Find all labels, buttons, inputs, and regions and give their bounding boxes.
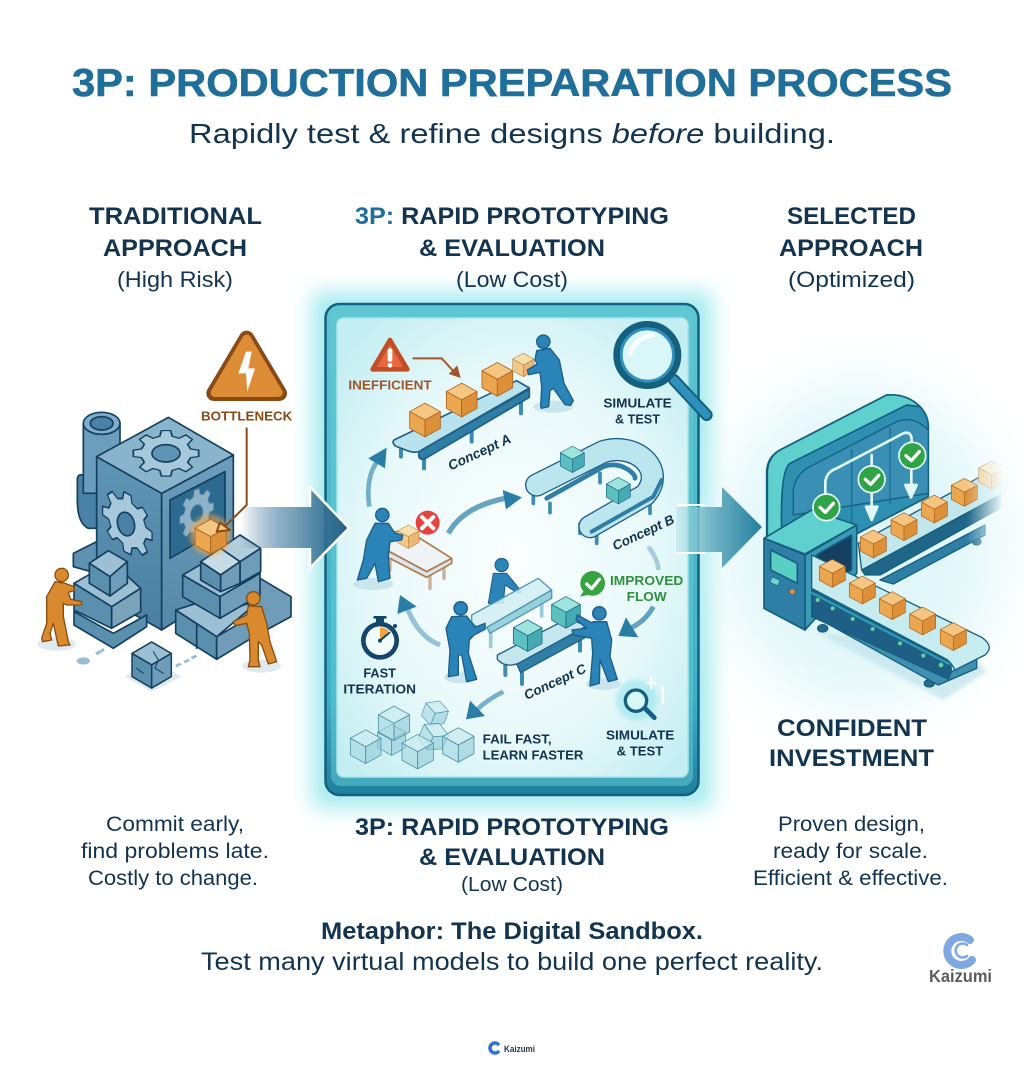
- heading: 3P rapid prototyping: (Low Cost): [456, 267, 568, 292]
- improved flow badge: [580, 571, 605, 597]
- small magnifier icon: [616, 678, 663, 721]
- label: improved flow: IMPROVED: [610, 574, 683, 588]
- worker at rejected table: [353, 508, 403, 590]
- heading: 3P repeated: (Low Cost): [461, 874, 563, 896]
- line shadow: [813, 630, 987, 700]
- text: traditional summary: Costly to change.: [88, 867, 258, 890]
- label: fail fast: LEARN FASTER: [483, 748, 583, 762]
- boxes on concept B: [560, 446, 630, 504]
- subtitle: Rapidly test & refine designs before building.: [189, 118, 835, 149]
- arrow: improved flow: [618, 547, 658, 637]
- conveyor A: [393, 381, 529, 468]
- label: simulate and test: [603, 396, 672, 426]
- label: bottleneck: BOTTLENECK: [201, 409, 293, 423]
- heading: 3P repeated: & EVALUATION: [419, 844, 605, 871]
- arrow: to concept A: [368, 448, 387, 507]
- heading: 3P rapid prototyping: & EVALUATION: [419, 235, 605, 262]
- failed glass models: [350, 697, 474, 769]
- label: fast iteration: FAST: [363, 666, 396, 680]
- label: simulate and test: [606, 728, 674, 758]
- worker A: [527, 335, 573, 413]
- cracked cube: [132, 642, 171, 688]
- boxes on front conveyor: [819, 559, 966, 651]
- heading: traditional approach: [89, 203, 262, 292]
- glass conveyor: [472, 578, 552, 647]
- illustration: selected production line: [764, 395, 1005, 700]
- machine body: [97, 417, 233, 630]
- heading: selected approach: [779, 203, 923, 292]
- front housing: [764, 510, 857, 630]
- logo: Kaizumi: [929, 937, 992, 986]
- label: fail fast: [483, 732, 583, 762]
- heading: confident investment: INVESTMENT: [769, 745, 934, 772]
- arrow: inefficient: [413, 358, 461, 378]
- footer logo: Kaizumi: [490, 1043, 535, 1055]
- heading: confident investment: CONFIDENT: [777, 715, 927, 742]
- boxes on conveyor A: [410, 353, 534, 437]
- worker right of conveyor: [572, 607, 621, 690]
- heading: 3P repeated: 3P: RAPID PROTOTYPING: [355, 814, 669, 841]
- worker left: [42, 568, 82, 646]
- text: selected summary: ready for scale.: [773, 840, 928, 863]
- connector line: [217, 428, 247, 532]
- worker left of conveyor: [444, 602, 485, 683]
- text: traditional summary: find problems late.: [81, 840, 269, 863]
- heading: traditional approach: APPROACH: [103, 235, 247, 262]
- background glow: [312, 292, 1000, 808]
- label: simulate and test: & TEST: [617, 744, 664, 758]
- gear: side: [103, 481, 152, 566]
- metaphor: Metaphor: The Digital Sandbox.: [321, 918, 703, 945]
- concept B label: Concept B: [610, 511, 677, 553]
- logo: Kaizumi: Kaizumi: [929, 966, 992, 986]
- label: fast iteration: [343, 666, 416, 696]
- arrow: to failed models: [466, 692, 503, 719]
- lower panel scene: [343, 508, 683, 769]
- text: traditional summary: Commit early,: [106, 813, 244, 836]
- warning icon: [214, 338, 279, 393]
- back arch: [767, 395, 928, 567]
- heading: confident investment: [769, 715, 934, 772]
- label: fast iteration: ITERATION: [343, 682, 416, 696]
- heading: traditional approach: TRADITIONAL: [89, 203, 262, 230]
- metaphor: [201, 918, 823, 976]
- metaphor: Test many virtual models to build one perfect reality.: [201, 948, 823, 976]
- heading: selected approach: (Optimized): [788, 267, 915, 292]
- heading: selected approach: SELECTED: [787, 203, 916, 230]
- gear: window: [180, 483, 213, 544]
- worker behind conveyor: [488, 558, 522, 603]
- left block stack: [73, 542, 147, 648]
- bottleneck cube: [189, 514, 231, 556]
- text: selected summary: Proven design,: [778, 813, 925, 836]
- concept C label: Concept C: [522, 661, 589, 703]
- label: fail fast: FAIL FAST,: [483, 732, 552, 746]
- front conveyor: [812, 555, 989, 687]
- reject marker: [416, 511, 440, 535]
- back conveyor with boxes: [858, 461, 1005, 584]
- title: 3P: PRODUCTION PREPARATION PROCESS: [72, 62, 952, 105]
- conveyor C: [497, 618, 587, 684]
- panel: rapid prototyping frame: [326, 304, 707, 795]
- concept B conveyor: [533, 450, 662, 543]
- label: simulate and test: SIMULATE: [606, 728, 674, 742]
- boxes on conveyor C: [513, 597, 580, 651]
- pipe: [77, 412, 120, 528]
- arrow: to rejected table: [397, 595, 440, 645]
- concept A: [348, 324, 707, 553]
- label: improved flow: [610, 574, 683, 604]
- label: improved flow: FLOW: [627, 590, 667, 604]
- arrow: traditional to 3P: [240, 487, 349, 568]
- text: traditional summary: [81, 813, 269, 890]
- heading: traditional approach: (High Risk): [117, 267, 233, 292]
- right block stack: [176, 535, 291, 659]
- rejected concept table: [383, 530, 452, 588]
- magnifier icon: [617, 324, 707, 415]
- white flow arrows: [825, 433, 917, 520]
- heading: 3P rapid prototyping: 3P: RAPID PROTOTYPING: [355, 203, 669, 230]
- label: inefficient: INEFFICIENT: [348, 377, 432, 392]
- label: simulate and test: & TEST: [615, 412, 660, 426]
- illustration: traditional machine: [37, 338, 293, 692]
- worker right: [233, 592, 277, 667]
- arrow: to concept B: [448, 490, 522, 533]
- rejected box: [398, 525, 419, 548]
- label: simulate and test: SIMULATE: [603, 396, 672, 410]
- text: selected summary: [753, 813, 948, 890]
- arrow: 3P to selected: [676, 487, 762, 568]
- heading: selected approach: APPROACH: [779, 235, 923, 262]
- warning icon: [373, 340, 407, 369]
- footer logo: Kaizumi: Kaizumi: [504, 1044, 535, 1055]
- check badges: [813, 442, 926, 521]
- gear: top: [133, 431, 199, 476]
- heading: 3P rapid prototyping: [355, 203, 669, 292]
- worker shadows: [37, 637, 281, 692]
- concept A label: Concept A: [446, 431, 513, 473]
- dashed trail: [77, 648, 197, 667]
- stopwatch icon: [361, 616, 399, 660]
- heading: 3P repeated: [355, 814, 669, 896]
- text: selected summary: Efficient & effective.: [753, 867, 948, 890]
